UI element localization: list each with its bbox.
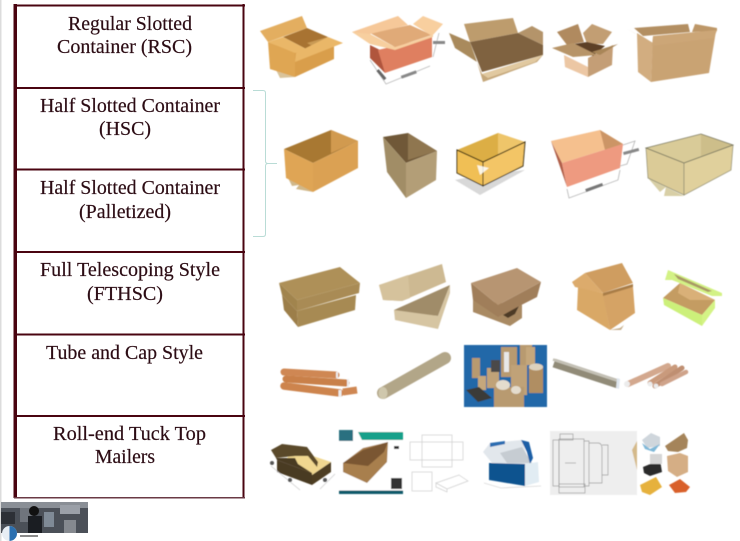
- label: Half Slotted Container (HSC): [40, 96, 221, 140]
- logo globe badge: [2, 526, 38, 541]
- label: Roll-end Tuck Top Mailers: Roll-end Tuck Top: [53, 424, 206, 445]
- image row: regular slotted containers: [260, 16, 717, 84]
- box: HSC tall kraft: [383, 133, 437, 198]
- mailer: dieline on grey panel: [550, 431, 637, 495]
- label: Full Telescoping Style (FTHSC): [40, 260, 220, 305]
- label: Half Slotted Container (HSC): Half Slotted Container: [40, 96, 221, 117]
- tube: long kraft: [378, 358, 445, 399]
- box: RSC wide open: [449, 18, 543, 82]
- mailer: dark brown with dimensions: [270, 444, 335, 490]
- box: HSC yellow outlined: [455, 133, 525, 195]
- tube: grey with white cap: [553, 360, 620, 389]
- label: Roll-end Tuck Top Mailers: Mailers: [95, 447, 155, 468]
- image row: full telescoping boxes: [279, 263, 722, 330]
- label: Half Slotted Container (Palletized): Half Slotted Container: [40, 178, 221, 199]
- box: RSC with dimensions: [352, 16, 445, 84]
- label: Half Slotted Container (HSC): (HSC): [99, 119, 151, 140]
- logo photo thumbnail: [1, 502, 88, 541]
- box: FTHSC lifted lid: [379, 264, 450, 329]
- label: Regular Slotted Container: Regular Slotted: [68, 14, 192, 35]
- table of box styles: [14, 4, 245, 498]
- label: Full Telescoping Style (FTHSC): (FTHSC): [87, 284, 163, 305]
- box: RSC open flaps: [260, 16, 343, 78]
- box: FTHSC kraft orange: [572, 263, 635, 330]
- box: FTHSC lime green: [663, 270, 722, 326]
- tubes: bundle with caps: [624, 366, 686, 388]
- label: Half Slotted Container (Palletized): [40, 178, 221, 223]
- box: RSC tall flaps: [627, 24, 717, 82]
- mailer: supplier advert card: [339, 430, 403, 494]
- image row: half slotted containers: [284, 130, 733, 198]
- tubes: stacked orange: [284, 372, 357, 397]
- mailer: collage of coloured boxes: [640, 433, 690, 495]
- image row: tubes and caps: [284, 345, 686, 407]
- label: Tube and Cap Style: Tube and Cap Style: [46, 343, 203, 364]
- label: Regular Slotted Container: Container (RSC): [57, 37, 192, 58]
- label: Full Telescoping Style (FTHSC): Full Telescoping Style: [40, 260, 220, 281]
- box: RSC small cube: [552, 24, 618, 77]
- box: HSC orange: [284, 130, 358, 192]
- box: FTHSC brown flat: [471, 268, 541, 326]
- label: Half Slotted Container (Palletized): (Palletized): [79, 202, 171, 223]
- mailer: line drawing plan: [410, 435, 468, 492]
- mailer: blue printed box: [483, 440, 541, 488]
- box: FTHSC closed lid: [279, 267, 360, 327]
- image row: roll-end tuck top mailers: [270, 430, 690, 495]
- label: Regular Slotted Container: [57, 14, 192, 58]
- box: HSC pale: [646, 134, 733, 196]
- photo: assorted paper tubes on blue: [464, 345, 547, 407]
- bracket grouping the half slotted rows: [253, 90, 277, 236]
- box: HSC with dimensions: [551, 130, 639, 198]
- label: Roll-end Tuck Top Mailers: [53, 424, 206, 468]
